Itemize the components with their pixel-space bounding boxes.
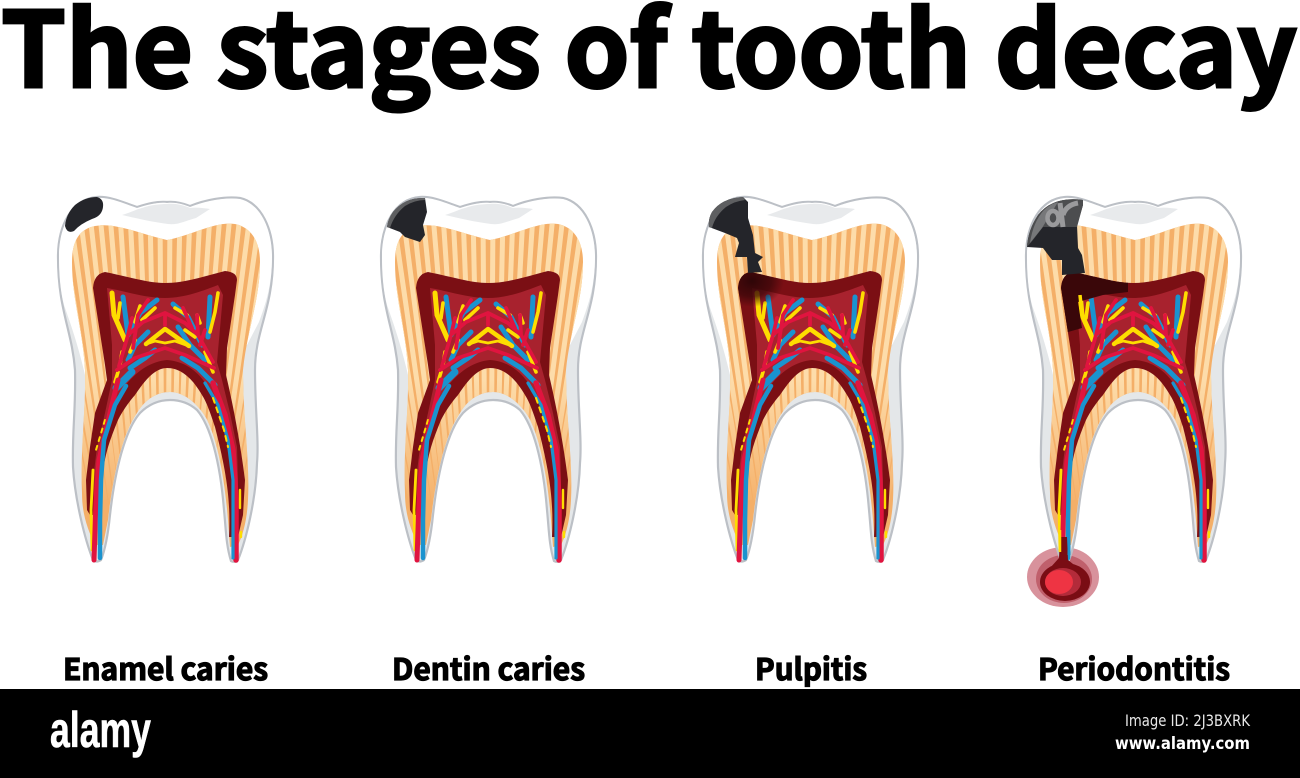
- label: periodontitis: Periodontitis: [1038, 645, 1230, 689]
- panel: enamel caries tooth: [30, 197, 300, 562]
- infection channel from root: [1050, 537, 1078, 568]
- pulp necrosis shading: [1061, 274, 1128, 334]
- decay: enamel cavity: [65, 197, 103, 232]
- watermark footer band: [0, 689, 1300, 778]
- decay: deep cavity: [1027, 199, 1085, 275]
- abscess at root tip: [1027, 547, 1099, 607]
- panel: periodontitis tooth: [1024, 196, 1242, 607]
- website: www.alamy.com: [1115, 734, 1250, 754]
- panel: pulpitis tooth: [702, 196, 920, 563]
- label: pulpitis: Pulpitis: [755, 645, 867, 689]
- label: enamel caries: Enamel caries: [63, 645, 268, 689]
- decay: dentin cavity: [387, 198, 427, 242]
- alamy logo: alamy: [50, 702, 151, 758]
- image id: Image ID: 2J3BXRK: [1125, 711, 1250, 730]
- decay: cavity reaching pulp: [709, 197, 763, 273]
- panel: dentin caries tooth: [353, 197, 623, 562]
- label: dentin caries: Dentin caries: [392, 645, 585, 689]
- pulp inflammation shading: [738, 272, 782, 306]
